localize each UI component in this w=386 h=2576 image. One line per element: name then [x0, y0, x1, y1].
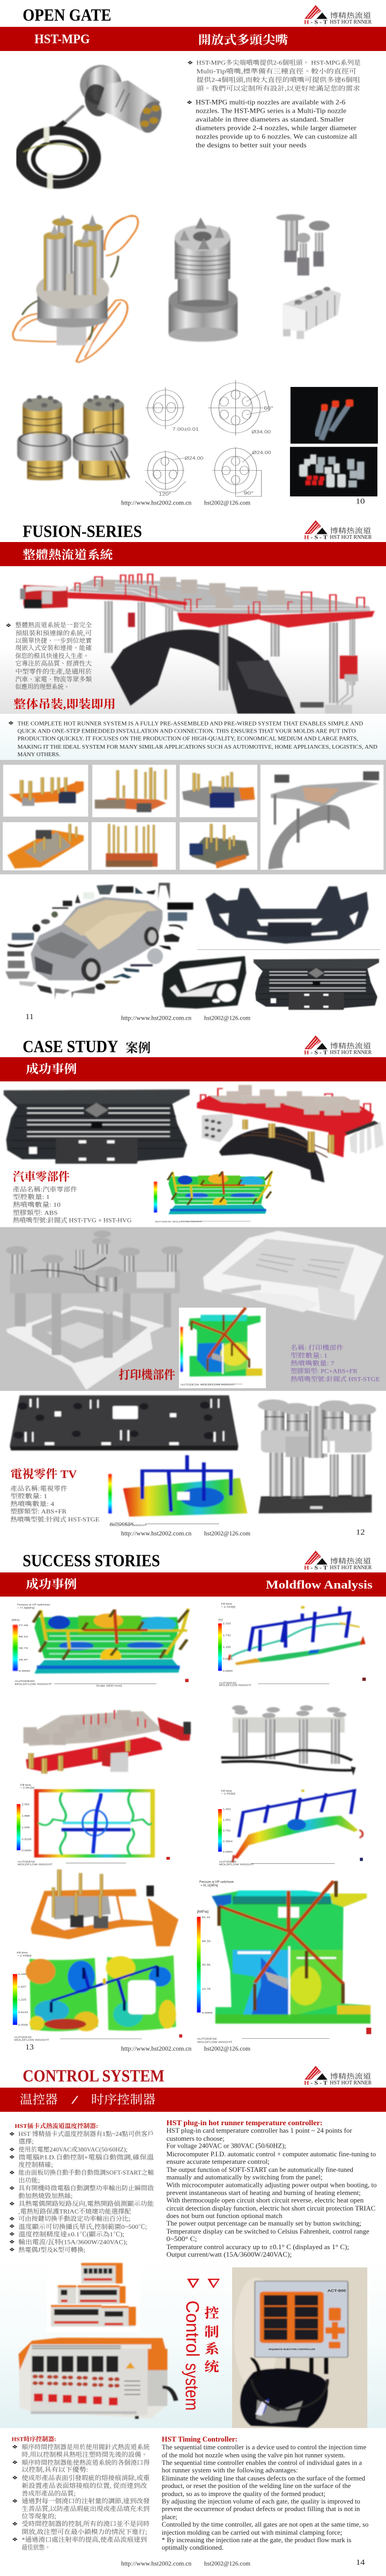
footer: hst2002@126.com: [204, 500, 250, 506]
logo: [304, 520, 372, 540]
chart: moldflow printer part: AUTODESK MOLDFLOW INSIGHT: [181, 1384, 235, 1386]
timing controller, chinese: 通過對每一個澆口的注射量的調節,達到改發: [21, 2497, 150, 2504]
label: printer parts: 打印機部件: [118, 1368, 175, 1381]
logo: 博精热流道: [330, 1557, 371, 1565]
chart: moldflow large printer part: 45.55: [202, 1964, 211, 1966]
photo: car grille: [4, 1089, 190, 1163]
timing controller, chinese: ❖: [12, 2521, 18, 2527]
temperature controller, chinese: 可由按鍵切換手動設定功率輸出百分比;: [18, 2215, 130, 2222]
technical drawings: [145, 380, 270, 496]
temperature controller, chinese: ❖: [9, 2231, 15, 2237]
chart: moldflow large printer part: 91.11: [202, 1916, 210, 1919]
chart: moldflow strip fill time: 2.310: [223, 1622, 231, 1625]
page number 12: 12: [356, 1527, 365, 1536]
chart: moldflow large printer part: MOLDFLOW INSIGHT: [197, 2041, 233, 2044]
timing controller, english: [162, 2436, 368, 2551]
photo: nozzle with cable: [21, 65, 165, 189]
timing controller, chinese: 位等現象的;: [21, 2513, 56, 2520]
chart: moldflow doors: 1.225: [18, 1999, 26, 2001]
footer: http://www.hst2002.com.cn: [121, 1530, 191, 1536]
illustration: red manifold on part: [197, 1085, 383, 1182]
english description: diameters provide 2-4 nozzles, while larger diameter: [196, 125, 357, 132]
timing controller, chinese: ❖: [12, 2444, 18, 2450]
chart: moldflow large printer part: 0.0000: [202, 2012, 212, 2015]
title: SUCCESS STORIES: SUCCESS STORIES: [23, 1552, 160, 1570]
specs: printer parts: 型腔數量: 1: [291, 1352, 328, 1359]
drawing dimensions: 7.00±0.01: [172, 427, 199, 432]
chart: moldflow frame fill: = 2.091[s]: [20, 1787, 35, 1789]
slide 2: fusion series: [0, 520, 386, 1021]
photo: silver manifold: [283, 287, 341, 339]
hero: red manifold and fender: [0, 566, 386, 714]
chart: moldflow large printer part: [MPa]: [197, 1909, 209, 1914]
photo: stacked controllers: [47, 2261, 140, 2332]
timing controller, chinese: ❖: [12, 2498, 18, 2504]
drawing dimensions: Ø34.00: [251, 430, 271, 435]
chart: moldflow grille pressure: Pressure at V/P switchover: [17, 1604, 50, 1606]
footer: hst2002@126.com: [204, 1015, 250, 1021]
temperature controller, chinese: 溫度顯示可切換攝氏華氏,控制範圍0~500℃;: [18, 2223, 147, 2230]
red slogan: 整体吊装,即装即用: [13, 698, 116, 711]
tile 7: [190, 824, 249, 868]
timing controller, chinese: ❖: [12, 2460, 18, 2465]
temperature controller, chinese: 選擇;: [18, 2138, 34, 2145]
english description: nozzles provide up to 6 nozzles. We can customize all: [196, 134, 357, 141]
tile 1: [9, 777, 84, 806]
chart: moldflow strip fill time: 0.0000: [223, 1670, 233, 1673]
page number 13: 13: [25, 2043, 34, 2051]
tile 4: tall grey manifold: [269, 771, 379, 869]
english paragraph panel: [0, 714, 386, 760]
chart: moldflow arc fill: AUTODESK: [219, 1861, 237, 1863]
chart: moldflow strip fill time: [s]: [219, 1619, 222, 1621]
footer: http://www.hst2002.com.cn: [121, 1015, 191, 1021]
chart: moldflow arc fill: 0.0000: [223, 1851, 233, 1854]
temperature controller, english: ensure accurate temperature control;: [166, 2158, 270, 2165]
photo: black TV plate: [10, 1395, 238, 1451]
specs: TV parts: 熱噴嘴型號:针阀式 HST-STGE: [10, 1516, 100, 1523]
logo: H - S - T: [304, 1564, 328, 1571]
temperature controller, chinese: 動加熱燒毀加熱絲;: [18, 2192, 72, 2199]
english description: the designs to better suit your needs: [196, 142, 307, 149]
chart: moldflow grille pressure: AUTODESK: [15, 1680, 35, 1683]
chart: moldflow small grille: AUTODESK MOLDFLOW INSIGHT: [155, 1220, 203, 1223]
chart: moldflow strip fill time: 1.732: [223, 1634, 231, 1637]
specs: automotive: 型腔數量: 1: [13, 1193, 50, 1200]
chart: moldflow arc fill: = 1.402[s]: [221, 1792, 235, 1795]
red band: [0, 1572, 386, 1597]
title: CASE STUDY: 案例: [125, 1041, 151, 1055]
chart: moldflow frame fill: MOLDFLOW INSIGHT: [18, 1863, 53, 1866]
chart: moldflow TV part: [108, 1455, 247, 1527]
chart: moldflow frame fill: [17, 1784, 170, 1866]
chart: moldflow doors: AUTODESK: [14, 2036, 32, 2039]
photo: sequence injection controller: ACT-800: [328, 2289, 346, 2293]
timing controller, chinese: 以控制,具有以下優勢:: [21, 2466, 88, 2473]
chart: moldflow grille pressure: = 77.49[MPa]: [17, 1607, 35, 1609]
photo: orange controller: [18, 2338, 176, 2419]
logo: H - S - T: [304, 19, 328, 25]
illustration: orange manifold: [31, 1869, 179, 1946]
english paragraph panel: ❖: [8, 720, 14, 726]
temperature controller, english: HST plug-in hot runner temperature controller:: [166, 2119, 323, 2127]
specs: printer parts: [291, 1344, 380, 1382]
chart: moldflow TV part: MOLDFLOW INSIGHT: [109, 1524, 147, 1527]
logo: 博精热流道: [330, 2073, 371, 2081]
label: automotive parts: 汽車零部件: [13, 1170, 70, 1183]
vertical red label: Control system: system: [182, 2363, 202, 2411]
red band: HST-MPG: [34, 32, 90, 46]
photo: brass heater nozzles: [17, 395, 129, 480]
title: OPEN GATE: OPEN GATE: [23, 6, 112, 25]
footer: hst2002@126.com: [204, 2560, 250, 2567]
chinese description: ❖: [187, 60, 193, 65]
chart: moldflow strip fill time: AUTODESK: [219, 1682, 237, 1685]
chinese paragraph: 似應用的理想系統。: [15, 683, 70, 690]
red band: 整體熱流道系統: [23, 548, 114, 561]
timing controller, chinese: 受時間控制器的控制,所有的澆口並不是同時: [21, 2520, 150, 2527]
footer: http://www.hst2002.com.cn: [121, 500, 191, 506]
illustration: car cutaway: [5, 883, 193, 1000]
temperature controller, chinese: 微電腦P.I.D.自動控制+電腦自動微調,確保溫: [18, 2154, 154, 2161]
temperature controller, english: does not burn out function optional match: [166, 2213, 283, 2220]
chart: moldflow arc fill: 1.051: [223, 1819, 231, 1821]
timing controller, chinese: 最佳狀態。: [21, 2544, 50, 2551]
chart: moldflow doors: = 2.449[s]: [17, 1955, 32, 1957]
footer: http://www.hst2002.com.cn: [121, 2560, 191, 2567]
drawing dimensions: [159, 406, 273, 497]
chinese description: [187, 59, 361, 92]
chart: moldflow frame fill: 2.091: [21, 1803, 29, 1806]
logo: H - S - T: [304, 1049, 328, 1056]
photo: black bumper: [205, 887, 368, 943]
logo: [304, 5, 372, 25]
timing controller, english: product, so as to improve the quality of the formed product;: [162, 2491, 325, 2498]
temperature controller, english: customers to choose;: [166, 2135, 225, 2142]
english paragraph panel: MANY OTHERS.: [18, 751, 60, 757]
slide 1: open gate: [0, 5, 386, 506]
vertical red label: 控制系统: 制: [204, 2325, 219, 2339]
chart: moldflow grille pressure: 38.74: [19, 1647, 28, 1650]
temperature controller, chinese: 熱電偶J型及K型可轉換;: [18, 2246, 85, 2253]
chart: moldflow large printer part: 68.33: [202, 1940, 211, 1943]
logo: [304, 2066, 372, 2086]
chart: moldflow small grille: [154, 1171, 272, 1223]
vertical red label: 控制系统: 统: [204, 2360, 220, 2374]
panel: controller photos backdrop: [0, 2258, 386, 2428]
chart: moldflow doors: Fill time: [17, 1952, 28, 1955]
photo: sequence injection controller: SEQUENCE INJECTION CONTROLLER: [269, 2348, 315, 2351]
illustration: four nozzle assembly: [258, 1400, 376, 1513]
timing controller, chinese: 順序時間控制器是用於使用閥針式熱流道系統: [21, 2443, 150, 2450]
timing controller, chinese: [12, 2435, 150, 2551]
chart: moldflow large printer part: [197, 1880, 371, 2044]
specs: automotive: 熱噴嘴型號:針閥式 HST-TVG + HST-HVG: [13, 1217, 132, 1224]
chart: moldflow large printer part: = 91.11[MPa]: [201, 1883, 218, 1887]
red band: 温控器: [20, 2093, 58, 2106]
vertical red label: 控制系统: 控: [204, 2306, 219, 2321]
chart: moldflow frame fill: Fill time: [20, 1784, 31, 1787]
timing controller, chinese: *通過澆口處注射率的提高,使產品流痕達到: [21, 2536, 147, 2543]
timing controller, english: place;: [162, 2514, 177, 2521]
timing controller, chinese: ❖: [12, 2537, 18, 2542]
temperature controller, chinese: HST 博精插卡式溫度控制器有1點~24點可供客戶: [18, 2130, 154, 2137]
panel: product tile grid: [0, 760, 386, 874]
temperature controller, chinese: ❖: [9, 2131, 15, 2137]
temperature controller, chinese: 溫度控制精度達±0.1℃(顯示為1℃);: [18, 2230, 124, 2238]
label: TV parts: 電視零件 TV: [10, 1468, 77, 1481]
chinese description: Multi-Tip噴嘴,標準備有三種直徑。較小的直徑可: [196, 68, 357, 75]
chart: moldflow arc fill: 0.3504: [223, 1840, 233, 1843]
photo: sequence injection controller: [232, 2267, 367, 2428]
chart: moldflow grille pressure: MOLDFLOW INSIGHT: [15, 1683, 52, 1686]
red band: /: [71, 2093, 79, 2106]
chinese paragraph: 以簡單快捷、一步到位地實: [15, 637, 92, 644]
chart: moldflow doors: 0.6123: [18, 2011, 28, 2014]
temperature controller, english: [166, 2119, 377, 2266]
red band: 时序控制器: [91, 2093, 156, 2106]
english description: available in three diameters as standard. Smaller: [196, 116, 344, 123]
specs: TV parts: [10, 1485, 100, 1523]
page number 11: 11: [25, 1012, 34, 1021]
chart: moldflow strip fill time: MOLDFLOW INSIGHT: [219, 1684, 252, 1687]
chart: moldflow grille pressure: 19.37: [19, 1659, 28, 1662]
temperature controller, chinese: ❖: [9, 2239, 15, 2245]
logo: 博精热流道: [330, 1042, 371, 1050]
chart: moldflow grille pressure: 58.12: [19, 1636, 28, 1638]
timing controller, chinese: 使成形產品表面引發瑕疵的熔接痕消除,或重: [21, 2474, 150, 2481]
chart: moldflow grille pressure: [12, 1604, 189, 1687]
photo: brass nozzles with orange wires: [13, 215, 138, 362]
temperature controller, chinese: ❖: [9, 2247, 15, 2252]
temperature controller, chinese: ❖: [9, 2185, 15, 2191]
specs: automotive: [13, 1185, 132, 1224]
drawing dimensions: Ø24.00: [184, 456, 203, 461]
photo: steel four-tip nozzle: [169, 217, 237, 342]
chart: moldflow strip fill time: = 2.310[s]: [221, 1606, 235, 1608]
chart: moldflow strip fill time: 1.155: [223, 1646, 231, 1649]
chart: moldflow arc fill: [218, 1789, 363, 1866]
temperature controller, chinese: 具有開機時微電腦自動調整功率輸出防止瞬間啟: [18, 2184, 154, 2191]
chinese paragraph: 預組裝和預連線的系統,可: [15, 630, 92, 636]
chart: moldflow grille pressure: Scale (800 mm): [96, 1685, 122, 1687]
temperature controller, chinese: 出功能;: [18, 2177, 40, 2184]
logo: [304, 1550, 372, 1571]
logo: H - S - T: [304, 534, 328, 540]
chart: moldflow strip fill time: 0.5775: [223, 1658, 233, 1660]
timing controller, chinese: 順序時間控制器能使熱流道系統的各個澆口得: [21, 2459, 150, 2466]
chart: moldflow grille pressure: 0.0000: [19, 1670, 31, 1673]
red band: [0, 1057, 386, 1081]
temperature controller, english: Output current/watt (15A/3600W/240VAC);: [166, 2251, 292, 2258]
chinese description: 頭。我們可以定制所有設計,以更好地滿足您的需求: [196, 85, 360, 92]
specs: printer parts: 熱噴嘴數量: 7: [291, 1359, 335, 1366]
chart: moldflow strip fill time: Fill time: [221, 1603, 232, 1606]
vertical red label: 控制系统: [204, 2306, 220, 2374]
photo: tubes on black: [291, 387, 378, 444]
timing controller, english: optimally conditioned.: [162, 2544, 224, 2551]
timing controller, chinese: HST時序控制器:: [12, 2435, 56, 2442]
chart: moldflow arc fill: Fill time: [221, 1790, 232, 1792]
logo: 博精热流道: [330, 527, 371, 535]
chinese paragraph: 現嵌入式安裝和連接。能確: [15, 644, 92, 651]
chart: moldflow large printer part: AUTODESK: [197, 2038, 217, 2040]
timing controller, chinese: 生善品質,以防產品瑕疵出現或產品填充未到: [21, 2505, 150, 2512]
temperature controller, chinese: HST插卡式熱流道溫度控制器:: [15, 2123, 98, 2129]
timing controller, english: HST Timing Controller:: [162, 2436, 237, 2443]
panel: part illustrations background: [0, 874, 386, 932]
chart: moldflow doors: 2.449: [18, 1973, 26, 1976]
slide 4: success stories: [0, 1550, 386, 2052]
specs: printer parts: 名稱: 打印機部件: [291, 1344, 344, 1351]
temperature controller, english: 0~500° C;: [166, 2236, 197, 2243]
chart: moldflow TV part: AUTODESK: [109, 1522, 134, 1526]
chart: moldflow doors: [13, 1952, 182, 2041]
illustration: white tray with nozzles: [6, 1231, 384, 1390]
logo: H - S - T: [304, 2080, 328, 2086]
temperature controller, chinese: ,電熱短路保護TRIAC不燒壞功能選擇配: [18, 2208, 131, 2215]
divider: [197, 949, 380, 950]
title: CASE STUDY: CASE STUDY: [23, 1037, 118, 1056]
page number 14: 14: [356, 2558, 365, 2566]
temperature controller, chinese: 能由面板切換自動手動自動微調SOFT-START之輸: [18, 2169, 154, 2176]
temperature controller, chinese: 使用於電壓240VAC或380VAC(50/60HZ);: [18, 2146, 128, 2153]
red band: 開放式多頭尖嘴: [198, 33, 288, 47]
chart: moldflow doors: 1.837: [18, 1986, 26, 1988]
chart: moldflow arc fill: MOLDFLOW INSIGHT: [219, 1863, 254, 1866]
temperature controller, chinese: ❖: [9, 2223, 15, 2229]
temperature controller, english: manually and automatically by switching from the panel;: [166, 2174, 323, 2181]
specs: automotive: 熱噴嘴數量: 10: [13, 1201, 61, 1208]
title: FUSION-SERIES: FUSION-SERIES: [23, 522, 142, 541]
specs: TV parts: 熱噴嘴數量: 4: [10, 1500, 54, 1507]
red band: [0, 27, 386, 51]
red band: [0, 542, 386, 566]
tile 3: [182, 772, 255, 808]
chart: moldflow grille pressure: 77.49: [19, 1624, 28, 1627]
page number 10: 10: [356, 496, 365, 506]
footer: hst2002@126.com: [204, 2045, 250, 2052]
chinese paragraph: 它專注於高品質、經濟性大: [15, 660, 92, 667]
drawing dimensions: 90°: [244, 491, 254, 496]
tile 5: [8, 824, 84, 868]
chart: moldflow arc fill: 0.701: [223, 1829, 231, 1832]
tile 2: [95, 767, 167, 812]
timing controller, chinese: ❖: [12, 2475, 18, 2480]
logo: [304, 1035, 372, 1056]
drawing dimensions: 120°: [159, 492, 171, 497]
drawing dimensions: 60°: [264, 406, 273, 411]
photo: plastic cups on black: [290, 447, 377, 496]
footer: http://www.hst2002.com.cn: [121, 2045, 191, 2052]
photo: grille: [254, 959, 379, 1010]
panel: grey printer parts: [0, 1227, 386, 1391]
timing controller, chinese: 善成形產品的品質;: [21, 2490, 76, 2497]
chart: moldflow frame fill: AUTODESK: [18, 1861, 35, 1863]
vertical red label: Control system: [182, 2279, 220, 2411]
vertical red label: Control system: Control: [182, 2301, 202, 2357]
english description: ❖: [187, 100, 192, 105]
temperature controller, chinese: [9, 2123, 154, 2253]
chart: moldflow frame fill: 1.568: [21, 1815, 29, 1818]
timing controller, chinese: 開放,故注塑可在最小鎖模力的情況下進行;: [21, 2528, 147, 2535]
slide 5: control system: [0, 2066, 386, 2567]
temperature controller, chinese: 度控制精確;: [18, 2161, 53, 2168]
english description: HST-MPG multi-tip nozzles are available with 2-6: [196, 99, 345, 106]
temperature controller, chinese: ❖: [9, 2201, 15, 2207]
chinese paragraph: 整體熱流道系統是一套完全: [15, 621, 92, 628]
temperature controller, chinese: ❖: [9, 2154, 15, 2160]
chinese paragraph: [5, 621, 92, 690]
specs: TV parts: 型腔數量: 1: [10, 1492, 47, 1499]
slide 3: case study: [0, 1035, 386, 1536]
illustration: red manifold: [24, 1710, 191, 1774]
chart: moldflow frame fill: 0.5228: [21, 1838, 32, 1841]
chinese description: 提供2-4個咀頭,而較大直徑的噴嘴可提供多達6個咀: [196, 76, 360, 83]
chart: moldflow large printer part: Pressure at V/P switchover: [199, 1880, 234, 1884]
photo: small nozzles trio: [276, 214, 330, 275]
red band: 成功事例: [26, 1062, 77, 1075]
temperature controller, english: Thermocouple type J and K type convertible;: [166, 2259, 289, 2266]
chart: moldflow doors: MOLDFLOW INSIGHT: [14, 2039, 49, 2041]
chinese paragraph: 保您的模具快速投入生產。: [15, 652, 89, 659]
logo: 博精热流道: [330, 12, 371, 20]
specs: printer parts: 塑膠類型: PC+ABS+FR: [291, 1367, 358, 1374]
illustration: nozzle row with black strip: [221, 1706, 356, 1775]
specs: automotive: 產品名稱:汽車零部件: [13, 1185, 78, 1192]
temperature controller, chinese: ❖: [9, 2147, 15, 2153]
timing controller, chinese: 新設置產品表面熔接痕的位置, 從而達到改: [21, 2482, 147, 2489]
timing controller, english: hot runner system with the following advantages:: [162, 2467, 298, 2474]
chart: moldflow grille pressure: [MPa]: [12, 1619, 19, 1622]
temperature controller, english: For voltage 240VAC or 380VAC (50/60HZ);: [166, 2143, 286, 2150]
chart: moldflow doors: 0.0000: [18, 2024, 28, 2026]
temperature controller, chinese: 輸出電流/瓦特(15A/3600W/240VAC);: [18, 2238, 128, 2246]
specs: automotive: 塑膠類型: ABS: [13, 1209, 57, 1216]
timing controller, chinese: 時,用以控制模具熱咀注塑時間先後的設備。: [21, 2451, 148, 2458]
english description: [187, 99, 357, 149]
specs: TV parts: 產品名稱:電視零件: [10, 1485, 68, 1492]
chinese paragraph: ❖: [5, 623, 12, 628]
chart: moldflow large printer part: 22.78: [202, 1988, 211, 1990]
chart: moldflow printer part: [179, 1308, 266, 1388]
photo: door panel: [162, 956, 246, 1008]
chart: moldflow strip fill time: [218, 1603, 366, 1687]
chart: moldflow frame fill: 0.0000: [21, 1849, 32, 1852]
drawing dimensions: Ø24.00: [253, 450, 271, 455]
temperature controller, chinese: ❖: [9, 2170, 15, 2176]
temperature controller, chinese: 具熱電偶開路短路反向,電熱開路偵測顯示功能: [18, 2200, 154, 2207]
english description: nozzles. The HST-MPG series is a Multi-Tip nozzle: [196, 108, 346, 115]
chinese paragraph: 中型零件的生產,是適用於: [15, 668, 92, 675]
chinese paragraph: 汽車、家電、物流等眾多類: [15, 676, 92, 683]
temperature controller, chinese: ❖: [9, 2216, 15, 2222]
tile 6: [106, 824, 158, 867]
specs: TV parts: 塑膠類型: ABS+FR: [10, 1507, 67, 1514]
footer: hst2002@126.com: [204, 1530, 250, 1536]
vertical red label: 控制系统: 系: [204, 2341, 220, 2357]
red band: [0, 2088, 386, 2112]
chart: moldflow frame fill: 1.046: [21, 1826, 29, 1829]
chart: moldflow arc fill: 1.402: [223, 1808, 231, 1811]
red band: 成功事例: [26, 1577, 77, 1591]
title: CONTROL SYSTEM: CONTROL SYSTEM: [23, 2067, 165, 2085]
